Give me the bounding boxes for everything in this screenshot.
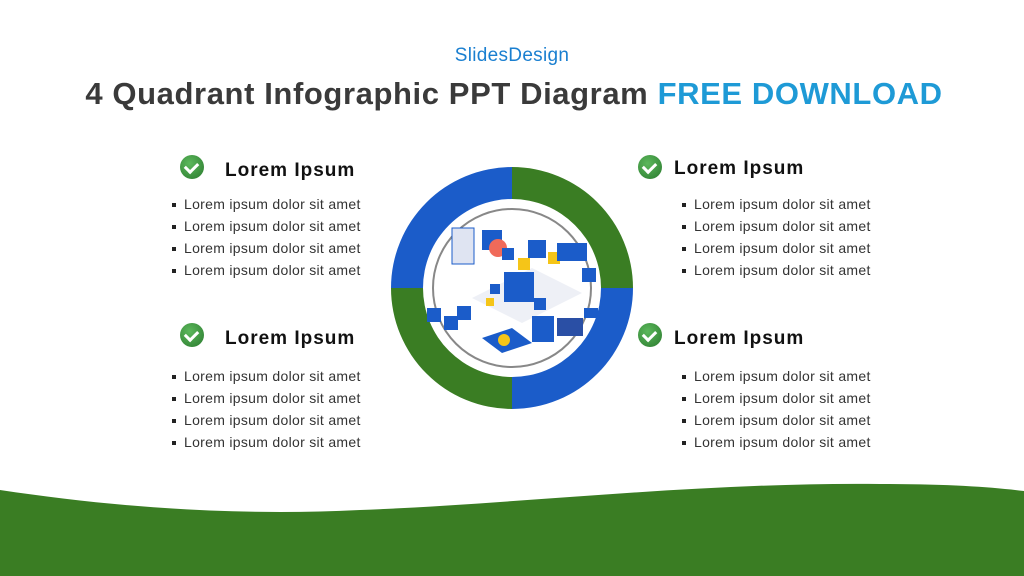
panel: bottom-left: Lorem ipsum dolor sit amet: [184, 368, 361, 384]
panel: bottom-right: Lorem Ipsum: [674, 328, 804, 349]
panel: top-right: Lorem ipsum dolor sit amet: [694, 196, 871, 212]
panel: bottom-left: [172, 323, 361, 450]
title: 4 Quadrant Infographic PPT Diagram FREE DOWNLOAD: [85, 76, 943, 111]
brand: SlidesDesign: [455, 45, 569, 66]
ring diagram: [391, 167, 633, 409]
illustration: [427, 228, 598, 353]
panel: top-left: Lorem ipsum dolor sit amet: [184, 240, 361, 256]
panel: bottom-right: [638, 323, 871, 450]
panel: top-left: Lorem ipsum dolor sit amet: [184, 196, 361, 212]
panel: bottom-left: Lorem ipsum dolor sit amet: [184, 390, 361, 406]
panel: top-left: Lorem Ipsum: [225, 160, 355, 181]
panel: top-right: Lorem ipsum dolor sit amet: [694, 240, 871, 256]
panel: bottom-right: Lorem ipsum dolor sit amet: [694, 390, 871, 406]
panel: bottom-right: Lorem ipsum dolor sit amet: [694, 368, 871, 384]
panel: bottom-left: Lorem Ipsum: [225, 328, 355, 349]
panel: top-right: Lorem Ipsum: [674, 158, 804, 179]
panel: top-right: Lorem ipsum dolor sit amet: [694, 218, 871, 234]
green wave footer: [0, 484, 1024, 576]
panel: top-right: [638, 155, 871, 278]
panel: top-left: Lorem ipsum dolor sit amet: [184, 218, 361, 234]
panel: bottom-right: Lorem ipsum dolor sit amet: [694, 412, 871, 428]
panel: bottom-right: Lorem ipsum dolor sit amet: [694, 434, 871, 450]
panel: top-left: [172, 155, 361, 278]
panel: top-right: Lorem ipsum dolor sit amet: [694, 262, 871, 278]
panel: top-left: Lorem ipsum dolor sit amet: [184, 262, 361, 278]
panel: bottom-left: Lorem ipsum dolor sit amet: [184, 412, 361, 428]
panel: bottom-left: Lorem ipsum dolor sit amet: [184, 434, 361, 450]
